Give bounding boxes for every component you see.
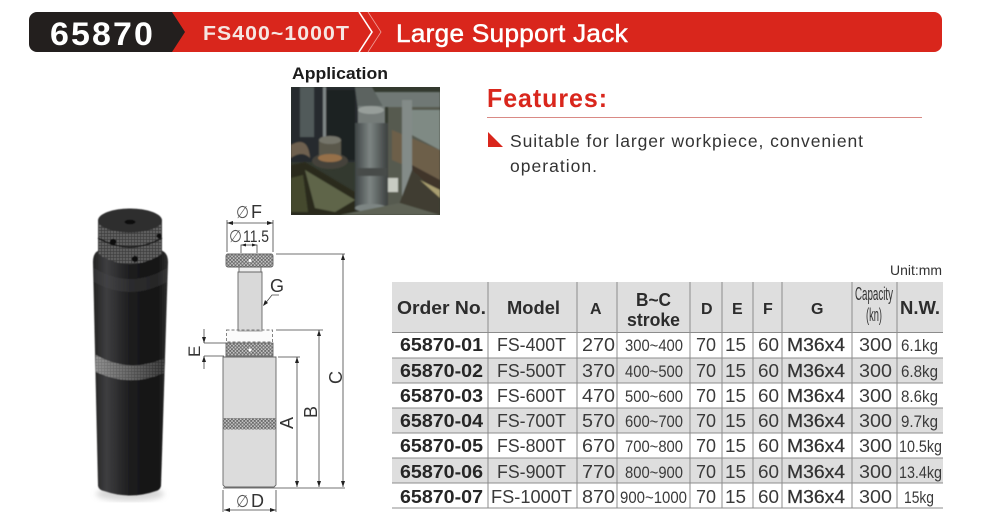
table header: B~C [636, 290, 671, 310]
row 65870-07: 60 [758, 487, 779, 507]
row 65870-05: M36x4 [787, 436, 845, 456]
row 65870-02: M36x4 [787, 361, 845, 381]
title banner: FS400~1000T [203, 23, 350, 45]
icon: red bullet triangle [488, 132, 503, 147]
row 65870-03: 300 [859, 386, 892, 406]
row 65870-01: M36x4 [787, 335, 845, 355]
row 65870-06: 770 [582, 462, 615, 482]
row 65870-04: 60 [758, 411, 779, 431]
row 65870-06: 65870-06 [400, 462, 483, 482]
row 65870-05: 60 [758, 436, 779, 456]
table header: Model [507, 298, 560, 318]
jack outline [223, 254, 276, 487]
dimension labels [185, 202, 346, 511]
row 65870-01: 300~400 [625, 336, 683, 355]
dimension labels: ∅ [236, 492, 249, 511]
row 65870-02: FS-500T [497, 361, 566, 381]
leader lines [204, 220, 345, 512]
row 65870-01: 300 [859, 335, 892, 355]
row 65870-04: M36x4 [787, 411, 845, 431]
row 65870-02: 400~500 [625, 362, 683, 381]
application heading: Application [292, 64, 388, 83]
row 65870-06: 13.4kg [899, 463, 942, 482]
features text: operation. [510, 156, 597, 176]
title banner: 65870 [50, 16, 155, 52]
specification table [392, 282, 943, 508]
row 65870-04: 15 [725, 411, 746, 431]
row 65870-05: 10.5kg [899, 437, 942, 456]
features text [488, 131, 863, 176]
dimension labels: A [277, 417, 297, 429]
dimension labels: F [251, 202, 262, 222]
table header [397, 284, 940, 330]
dimension labels: ∅ [229, 227, 242, 246]
title banner: Large Support Jack [396, 20, 628, 48]
row 65870-04: 600~700 [625, 412, 683, 431]
row 65870-03: FS-600T [497, 386, 566, 406]
table header: (kn) [866, 305, 882, 325]
row 65870-01: 15 [725, 335, 746, 355]
dimension labels: ∅ [236, 203, 249, 222]
row 65870-03: 70 [696, 386, 716, 406]
row 65870-06: FS-900T [497, 462, 566, 482]
knurl center dots [248, 259, 252, 352]
row 65870-03: 15 [725, 386, 746, 406]
row 65870-01: 70 [696, 335, 716, 355]
row 65870-02: 15 [725, 361, 746, 381]
row 65870-04: 9.7kg [901, 412, 938, 431]
table header: E [732, 301, 743, 318]
dimension labels: G [270, 276, 284, 296]
dimension labels: B [301, 406, 321, 418]
row 65870-02: 370 [582, 361, 615, 381]
row 65870-04: 570 [582, 411, 615, 431]
row 65870-03: 470 [582, 386, 615, 406]
row 65870-07 [400, 487, 934, 507]
row 65870-04 [400, 411, 938, 431]
row 65870-05: 700~800 [625, 437, 683, 456]
application photo [291, 87, 440, 215]
row 65870-07: 15 [725, 487, 746, 507]
row 65870-04: 300 [859, 411, 892, 431]
row 65870-02: 300 [859, 361, 892, 381]
row 65870-06 [400, 462, 942, 482]
table backgrounds [392, 282, 943, 483]
table header: N.W. [900, 298, 940, 318]
dimension labels: C [326, 371, 346, 384]
row 65870-07: 70 [696, 487, 716, 507]
row 65870-06: 60 [758, 462, 779, 482]
row 65870-03: M36x4 [787, 386, 845, 406]
row 65870-05: 670 [582, 436, 615, 456]
row 65870-01: FS-400T [497, 335, 566, 355]
row 65870-07: 15kg [904, 488, 934, 507]
row 65870-03 [400, 386, 938, 406]
row 65870-04: 70 [696, 411, 716, 431]
unit note: Unit:mm [890, 262, 942, 278]
row 65870-02: 65870-02 [400, 361, 483, 381]
table header: Order No. [397, 298, 486, 318]
row 65870-01: 65870-01 [400, 335, 483, 355]
row 65870-07: M36x4 [787, 487, 845, 507]
row 65870-01: 270 [582, 335, 615, 355]
row 65870-02: 60 [758, 361, 779, 381]
row 65870-05: 300 [859, 436, 892, 456]
row 65870-06: 70 [696, 462, 716, 482]
features text: Suitable for larger workpiece, convenient [510, 131, 863, 151]
row 65870-03: 60 [758, 386, 779, 406]
row 65870-03: 500~600 [625, 387, 683, 406]
row 65870-05: 15 [725, 436, 746, 456]
row 65870-05: 70 [696, 436, 716, 456]
row 65870-01: 6.1kg [901, 336, 938, 355]
row 65870-01: 60 [758, 335, 779, 355]
title banner [29, 12, 942, 52]
row 65870-02: 70 [696, 361, 716, 381]
product photo: support jack [93, 208, 168, 501]
row 65870-07: 300 [859, 487, 892, 507]
table rules [392, 282, 943, 508]
row 65870-03: 8.6kg [901, 387, 938, 406]
row 65870-01 [400, 335, 938, 355]
table header: stroke [627, 310, 680, 330]
row 65870-06: 15 [725, 462, 746, 482]
row 65870-02 [400, 361, 938, 381]
dimension arrows [202, 221, 345, 512]
row 65870-04: FS-700T [497, 411, 566, 431]
row 65870-06: 300 [859, 462, 892, 482]
dimension labels: D [251, 491, 264, 511]
technical drawing with dimensions [185, 202, 346, 512]
features heading: Features: [487, 83, 608, 113]
row 65870-06: 800~900 [625, 463, 683, 482]
row 65870-07: FS-1000T [491, 487, 572, 507]
row 65870-05 [400, 436, 942, 456]
row 65870-02: 6.8kg [901, 362, 938, 381]
dimension labels: 11.5 [243, 227, 269, 246]
table header: Capacity [855, 284, 893, 304]
table header: A [590, 301, 602, 318]
row 65870-07: 870 [582, 487, 615, 507]
table header: G [811, 301, 823, 318]
row 65870-04: 65870-04 [400, 411, 483, 431]
table header: D [701, 301, 713, 318]
dimension labels: E [185, 346, 204, 357]
row 65870-05: 65870-05 [400, 436, 483, 456]
row 65870-06: M36x4 [787, 462, 845, 482]
row 65870-07: 900~1000 [620, 488, 687, 507]
row 65870-03: 65870-03 [400, 386, 483, 406]
row 65870-05: FS-800T [497, 436, 566, 456]
table header: F [763, 301, 773, 318]
row 65870-07: 65870-07 [400, 487, 483, 507]
